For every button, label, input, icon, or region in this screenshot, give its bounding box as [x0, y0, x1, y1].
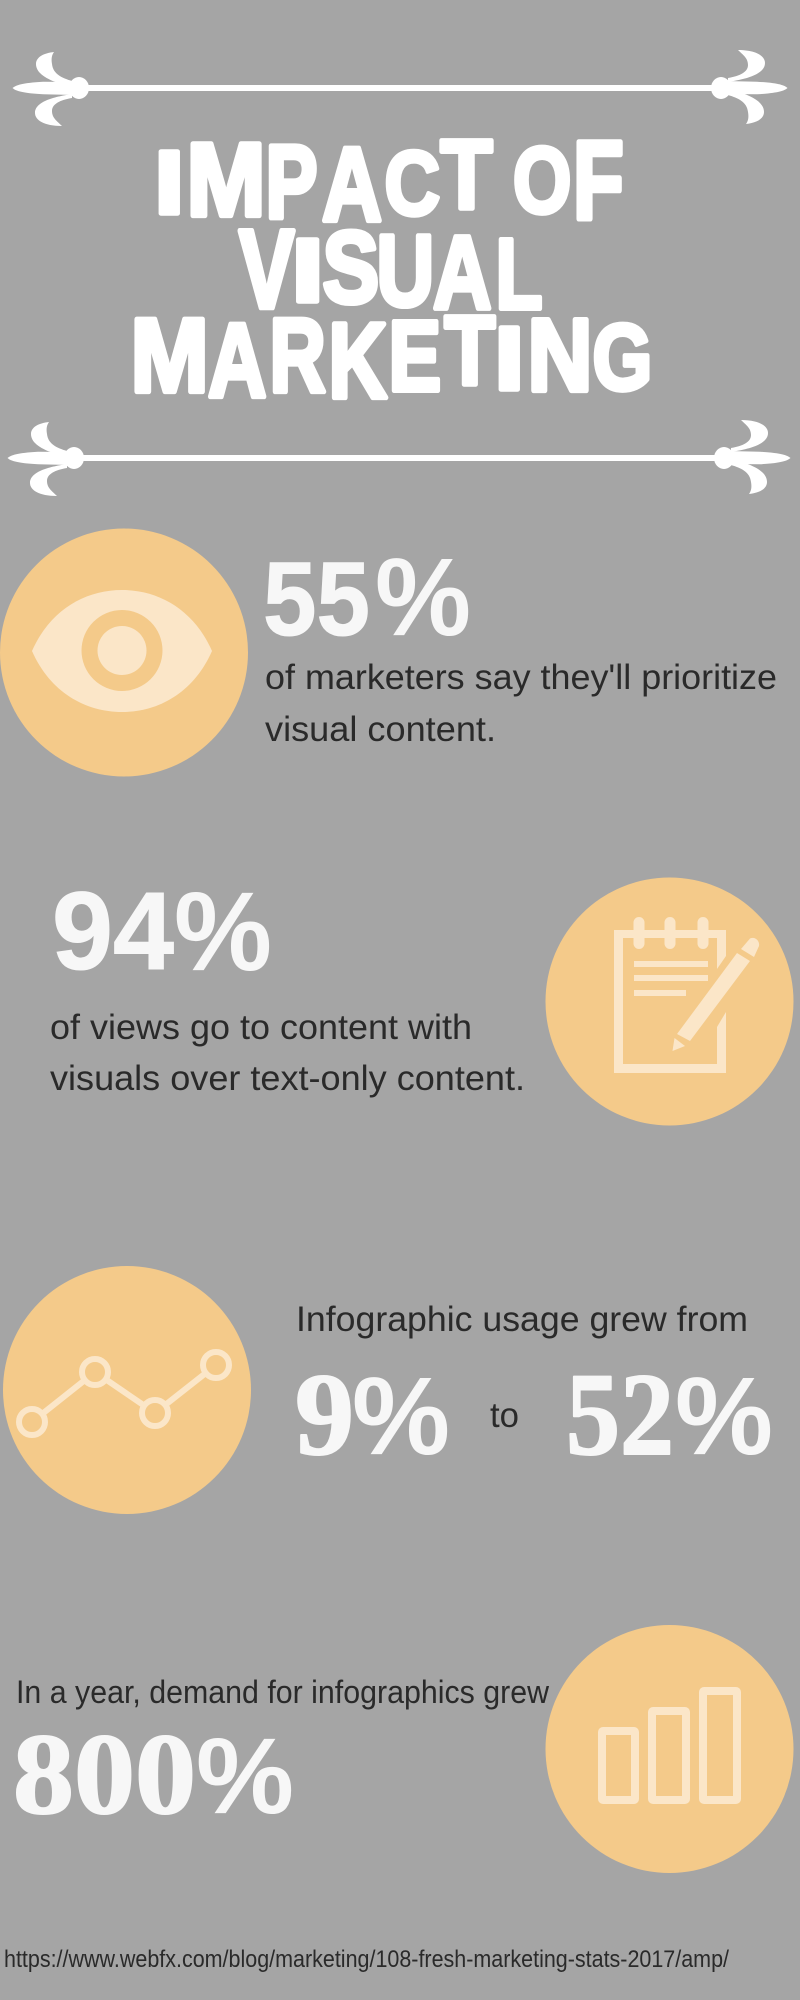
title: F	[573, 118, 624, 242]
text: 55% description: of marketers say they'll prioritize	[265, 658, 777, 697]
title: E	[388, 301, 441, 413]
title: A	[433, 215, 491, 331]
stat: 55%: 55	[263, 541, 370, 658]
title	[130, 118, 652, 421]
text: 94% description: of views go to content with	[50, 1008, 472, 1047]
stat: 9%: %	[352, 1355, 450, 1478]
title: R	[270, 296, 326, 414]
title: A	[322, 126, 382, 244]
title: N	[528, 298, 592, 413]
stat: 55%	[263, 536, 471, 659]
title: T	[440, 121, 492, 230]
stat: 55%: %	[375, 536, 471, 659]
stat: 800%	[13, 1711, 294, 1839]
stat: 800%: 800	[13, 1711, 196, 1839]
stat: 94%: %	[174, 869, 272, 994]
text: to: to	[490, 1396, 519, 1435]
stat: 52%: %	[675, 1355, 773, 1478]
stat: 9%: 9	[295, 1349, 354, 1480]
title: C	[384, 132, 440, 234]
icon: bar chart in circle	[546, 1625, 794, 1873]
icon: notepad and pencil in circle	[546, 878, 794, 1126]
text: 94% description	[50, 1008, 525, 1098]
title: I	[494, 309, 525, 409]
stat: 52%	[566, 1349, 773, 1480]
title: T	[444, 297, 495, 406]
stat: 94%	[52, 869, 272, 994]
source url: https://www.webfx.com/blog/marketing/108-fresh-marketing-stats-2017/amp/	[4, 1946, 729, 1973]
title: K	[328, 302, 387, 421]
title: S	[322, 210, 379, 324]
text: 94% description: visuals over text-only content.	[50, 1059, 525, 1098]
title: M	[130, 298, 209, 415]
icon: eye in circle	[0, 528, 248, 776]
stat: 52%: 52	[566, 1349, 674, 1480]
top ornamental divider	[12, 50, 788, 126]
text: 55% description	[265, 658, 777, 749]
title: A	[208, 301, 266, 419]
title: P	[266, 125, 318, 240]
icon: line chart in circle	[3, 1266, 251, 1514]
stat: 94%: 94	[52, 870, 174, 993]
title: G	[592, 305, 652, 410]
bottom ornamental divider	[8, 420, 790, 496]
title: L	[496, 218, 543, 330]
title: O	[513, 128, 571, 234]
stat: 9%	[295, 1349, 450, 1480]
title: V	[239, 207, 294, 331]
title: I	[291, 221, 324, 321]
text: infographic usage: Infographic usage grew from	[296, 1300, 748, 1339]
title: M	[186, 123, 266, 238]
title: I	[154, 133, 185, 233]
text: demand for infographics: In a year, demand for infographics grew	[16, 1674, 550, 1710]
title: U	[376, 216, 434, 328]
stat: 800%: %	[196, 1715, 294, 1836]
text: 55% description: visual content.	[265, 710, 496, 749]
